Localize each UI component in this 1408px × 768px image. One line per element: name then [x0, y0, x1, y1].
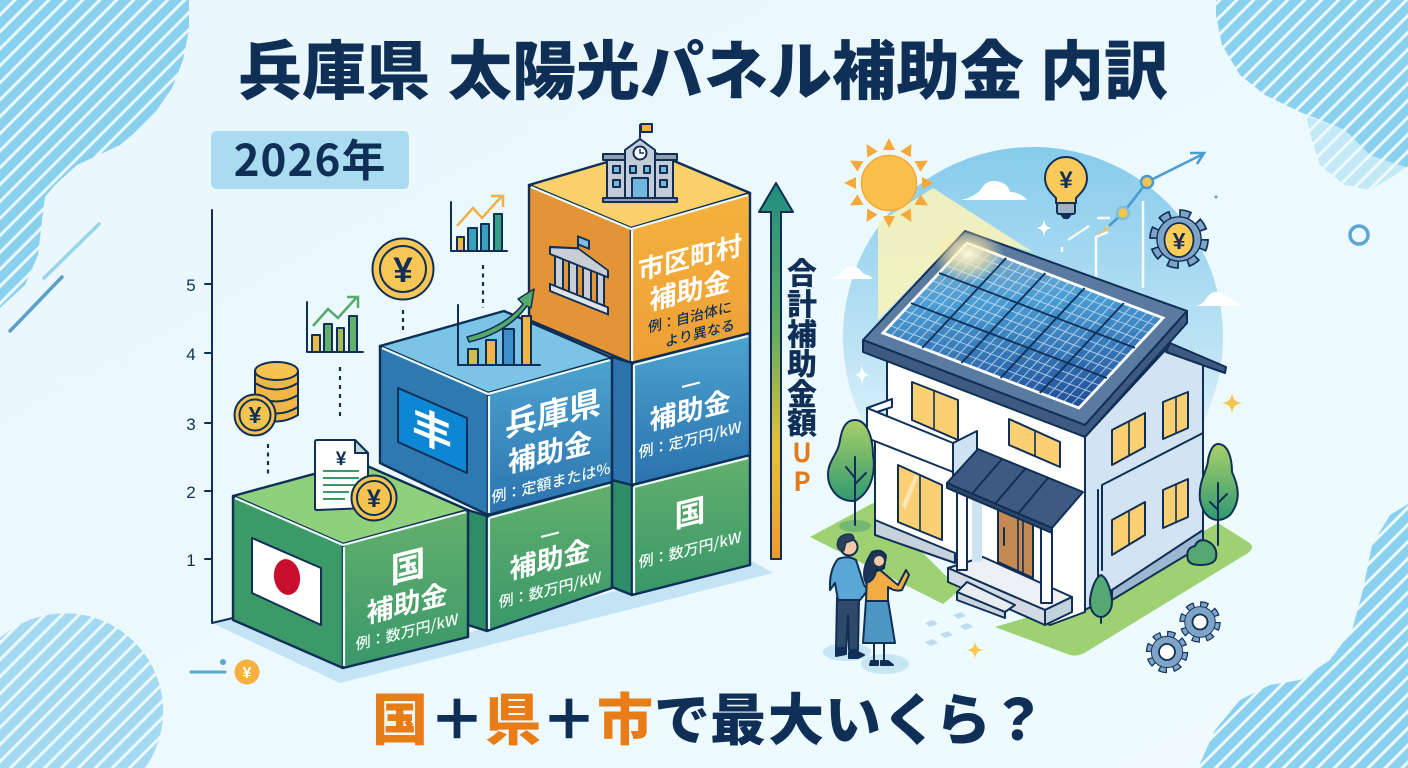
window: lower left	[898, 465, 942, 540]
label: 例 数万円/kW: 例：数万円/kW	[639, 525, 742, 573]
y axis with ticks and numbers: 2	[186, 483, 196, 502]
label: 例 定万円/kW: 例：定万円/kW	[639, 415, 742, 463]
label: 例 数万円/kW: 例：数万円/kW	[356, 607, 459, 655]
window: upper balcony	[912, 382, 958, 440]
decoration: top-right striped blob	[1216, 0, 1408, 190]
label: 市区町村: 市区町村	[638, 224, 742, 288]
chart ground shadow	[212, 560, 773, 683]
tree: right	[1200, 444, 1238, 545]
icon: large yen coin: ¥	[393, 251, 413, 290]
label: より異なる: より異なる	[665, 315, 735, 352]
window: right wall lower 1	[1112, 502, 1145, 555]
icon: large yen coin	[372, 238, 434, 300]
y axis with ticks and numbers: 3	[186, 415, 196, 434]
window: right wall upper 2	[1163, 392, 1188, 439]
decoration: line, dot and yen badge	[191, 659, 260, 684]
background sphere behind house	[843, 147, 1223, 527]
label: 例 定額または%: 例：定額または%	[492, 456, 610, 508]
stack: right column blue prefecture block	[612, 333, 750, 485]
bush	[1187, 540, 1216, 565]
icon: yen light bulb	[1045, 157, 1087, 218]
y axis with ticks and numbers: 1	[186, 551, 196, 570]
dotted connector 2	[339, 367, 341, 420]
label: 例 数万円/kW: 例：数万円/kW	[499, 565, 602, 613]
県: 県	[485, 676, 541, 757]
icon: growth chart on blue block	[458, 289, 540, 365]
icon: teal bar chart	[451, 196, 507, 251]
window: right wall lower 2	[1163, 479, 1188, 528]
dotted connector 1	[267, 444, 269, 478]
label: dash: —	[540, 514, 560, 550]
label: dash: —	[681, 364, 701, 400]
decoration: bottom-left striped circle	[0, 613, 163, 768]
plus: ＋	[429, 676, 485, 757]
icon: yen gear: ¥	[1173, 228, 1186, 254]
市: 市	[597, 676, 653, 757]
sparkles	[854, 196, 1244, 660]
house: belt line and pipe	[1098, 433, 1203, 577]
woman	[863, 551, 909, 665]
y axis with ticks and numbers: 4	[186, 345, 196, 364]
icon: subsidy document and coin: ¥	[336, 449, 347, 470]
porch steps	[957, 582, 1015, 618]
roof: right gable	[1166, 343, 1226, 373]
label: 補助金: 補助金	[367, 571, 447, 631]
icon: bank on left face	[550, 225, 608, 314]
house: base right	[1112, 530, 1203, 600]
title: 兵庫県太陽光パネル補助金内訳	[238, 21, 1168, 113]
stack: municipal orange block	[529, 150, 750, 363]
icon: coin stack: ¥	[249, 402, 262, 428]
window: right wall upper 1	[1112, 413, 1145, 465]
roof: main surface	[863, 231, 1187, 437]
door	[998, 508, 1033, 578]
icon: subsidy document and coin	[315, 440, 396, 520]
label: 国: 国	[391, 535, 425, 594]
shadow under couple	[823, 643, 909, 674]
panel glare	[932, 226, 1004, 282]
arrow: total subsidy increases	[759, 183, 793, 559]
year badge: 2026年	[234, 125, 386, 189]
balcony	[867, 399, 977, 482]
icon: city hall on top of stack	[603, 124, 677, 202]
clouds	[830, 181, 1240, 306]
decoration: accent lines top-left	[10, 224, 99, 331]
decoration: bottom-right striped blob	[1198, 504, 1408, 768]
window: upper center	[1009, 419, 1060, 467]
icon: Japanese flag	[252, 538, 321, 625]
house	[863, 226, 1226, 625]
label: 兵庫県: 兵庫県	[505, 377, 601, 447]
solar panel array	[883, 226, 1163, 408]
stack: right column green national block	[612, 455, 750, 595]
icon: coin stack	[234, 362, 298, 436]
dotted connector 4	[482, 265, 484, 308]
label: UP: UP	[792, 433, 812, 499]
wind turbines and street-light strokes	[1062, 201, 1143, 288]
stack: center column green national block	[468, 482, 612, 631]
tree: left	[828, 420, 874, 532]
label: 補助金: 補助金	[650, 258, 730, 318]
sun beam	[878, 188, 1033, 320]
label: 国: 国	[674, 485, 706, 538]
icon: gear lower left	[1150, 635, 1184, 669]
label: 補助金: 補助金	[510, 527, 590, 587]
label: 補助金: 補助金	[508, 420, 592, 481]
decoration: top-left striped blob	[0, 0, 189, 308]
lawn	[810, 503, 1252, 656]
man	[830, 534, 868, 658]
label: 補助金: 補助金	[650, 378, 730, 438]
house: right wall	[1085, 345, 1203, 610]
porch floor	[948, 557, 1072, 625]
icon: subsidy document and coin: ¥	[367, 485, 381, 513]
icon: prefecture flag: 丰	[412, 391, 452, 465]
icon: yen gear	[1154, 214, 1204, 264]
house: base left	[875, 520, 955, 563]
stack: center column blue prefecture block	[380, 311, 612, 515]
porch columns	[957, 492, 1052, 603]
icon: sun	[844, 138, 934, 228]
small shrub tree	[1090, 575, 1112, 623]
house: left wall	[875, 352, 1085, 625]
dotted connector 3	[402, 310, 404, 330]
decoration: line, dot and yen badge: ¥	[243, 665, 252, 682]
couple looking at house	[823, 534, 909, 674]
stack: front green national block	[233, 462, 468, 668]
icon: prefecture flag	[398, 388, 467, 473]
icon: green bar chart	[307, 297, 363, 352]
y axis with ticks and numbers: 5	[186, 276, 196, 295]
vertical label: total subsidy up: 合計補助金額	[787, 249, 817, 443]
garden stepping stones	[925, 612, 973, 646]
icon: yen light bulb: ¥	[1059, 167, 1073, 194]
bottom question headline	[372, 676, 1046, 757]
y axis with ticks and numbers	[186, 210, 233, 623]
icon: gear upper right	[1183, 605, 1217, 639]
porch roof	[947, 449, 1083, 533]
label: 例 自治体に: 例：自治体に	[648, 297, 732, 337]
decoration: ring	[1350, 226, 1368, 244]
rest of question: で最大いくら？	[654, 676, 1046, 757]
bottom question headline: 国	[372, 676, 428, 757]
plus: ＋	[541, 676, 597, 757]
icon: rising arrow with nodes	[1098, 153, 1204, 236]
